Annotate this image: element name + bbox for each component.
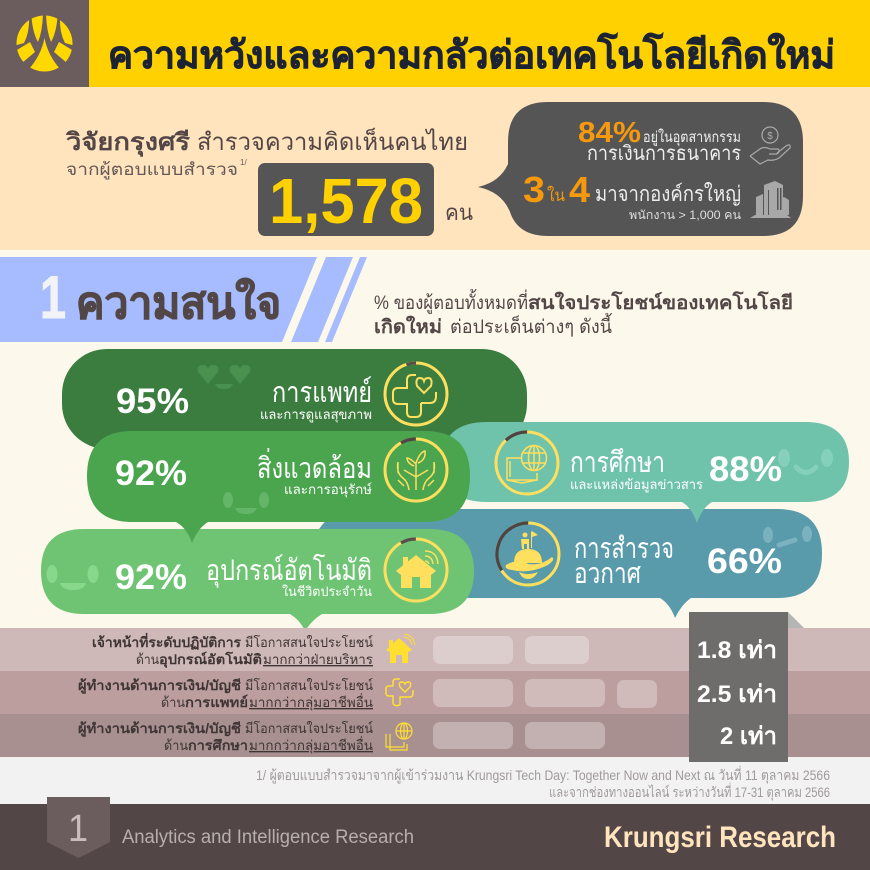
icon: health cross ring [377,355,455,433]
bars: row 2 multiplier [433,679,657,708]
survey intro text [65,127,468,180]
tab: multiplier values: 2 เท่า [720,723,777,750]
tab: multiplier values: 1.8 เท่า [697,637,777,664]
bubble: medical 95%: และการดูแลสุขภาพ [260,407,372,423]
row 3 text [78,720,373,754]
footer: Krungsri Research [604,821,836,854]
respondent count: คน [445,200,473,225]
survey intro text: วิจัยกรุงศรี [65,129,190,158]
icon: astronaut on planet ring [485,511,571,597]
bubble: environment 92%: และการอนุรักษ์ [284,482,372,498]
bubble: automation devices 92%: อุปกรณ์อัตโนมัติ [206,553,372,588]
bubble: space exploration 66%: การสำรวจ [574,533,674,565]
respondent count: 1,578 [269,165,423,237]
tab: multiplier values [689,612,804,762]
face: smile [778,449,833,472]
bubble: automation devices 92% [41,528,474,631]
panel: section heading: 1 [40,264,66,331]
footer [0,797,870,870]
row 1 text: ด้าน [136,652,159,667]
callout: respondent profile [478,102,803,236]
bubble: medical 95% [62,349,527,449]
bubble: education 88%: การศึกษา [570,447,665,479]
badge: page number: 1 [68,808,88,850]
bubble: education 88%: และแหล่งข้อมูลข่าวสาร [570,477,703,493]
footer: Analytics and Intelligence Research [122,827,414,848]
bubble: education 88%: 88% [709,450,782,489]
row 2 text: การแพทย์ [185,694,248,710]
tab: multiplier values: 2.5 เท่า [697,681,777,708]
section description: เกิดใหม่ [374,315,442,338]
icon: small house [386,634,415,663]
row 2 text [78,677,373,711]
bubble: space exploration 66% [312,509,822,618]
row 2 text: ผู้ทำงานด้านการเงิน/บัญชี [78,678,241,694]
icon: hand and coin [750,127,790,164]
survey intro text: สำรวจความคิดเห็นคนไทย [197,127,468,156]
bubble: education 88% [442,419,849,523]
header bar [0,0,870,87]
row 1 text: มากกว่าฝ่ายบริหาร [263,652,373,667]
callout: respondent profile: มาจากองค์กรใหญ่ [595,182,741,206]
row 3 text: ด้าน [164,738,188,753]
row 1 text [92,632,373,668]
title: ความหวังและความกลัวต่อเทคโนโลยีเกิดใหม่ [108,32,835,77]
section description: ต่อประเด็นต่างๆ ดังนี้ [450,313,612,338]
section description: % ของผู้ตอบทั้งหมดที่ [374,289,528,314]
row 3 text: การศึกษา [188,738,248,753]
callout: respondent profile: การเงินการธนาคาร [587,143,741,165]
callout: respondent profile: 4 [569,169,590,210]
badge: page number [47,797,110,858]
callout: respondent profile: พนักงาน > 1,000 คน [629,208,741,222]
panel: occupation multipliers [0,612,870,762]
callout: respondent profile: 3 [523,169,545,210]
panel: section heading [0,257,367,342]
face: neutral smile [223,492,269,514]
icon: small globe and book [386,723,412,750]
page background [0,250,870,628]
icon: small health cross [386,679,413,706]
icon: Krungsri logo [16,16,72,72]
bubble: medical 95%: การแพทย์ [272,376,372,409]
callout: respondent profile: 84% [578,117,641,149]
footnote [0,757,870,804]
face: neutral smile [46,565,98,590]
row 3 text: ผู้ทำงานด้านการเงิน/บัญชี [78,721,241,737]
row 2 text: ด้าน [161,695,185,710]
bubble: space exploration 66%: อวกาศ [574,558,641,590]
bars: row 3 multiplier [433,722,605,749]
icon: office building [750,181,791,218]
bubble: automation devices 92%: 92% [115,558,187,597]
callout: respondent profile: ใน [547,185,565,205]
bubble: environment 92% [87,428,470,543]
callout: respondent profile: อยู่ในอุตสาหกรรม [643,128,741,147]
bubble: automation devices 92%: ในชีวิตประจำวัน [282,584,372,599]
survey intro text: จากผู้ตอบแบบสำรวจ [66,160,238,180]
bubble: environment 92%: 92% [115,454,187,493]
survey intro text: 1/ [240,158,247,167]
row 2 text: มากกว่ากลุ่มอาชีพอื่น [249,693,373,711]
bubble: space exploration 66%: 66% [707,542,782,581]
icon: smart home ring [374,528,458,612]
bubble: medical 95%: 95% [116,382,189,421]
bars: row 1 multiplier [433,636,589,664]
bubble: environment 92%: สิ่งแวดล้อม [257,448,372,485]
icon: hands and plant ring [374,428,458,512]
row 3 text: มากกว่ากลุ่มอาชีพอื่น [249,736,373,754]
panel: survey summary [0,87,870,250]
row 1 text: มีโอกาสสนใจประโยชน์ [245,634,373,650]
row 2 text: มีโอกาสสนใจประโยชน์ [245,677,373,693]
section description [374,289,793,338]
icon: hand and coin: $ [767,131,773,142]
row 1 text: อุปกรณ์อัตโนมัติ [159,650,262,668]
panel: section heading: ความสนใจ [76,277,281,328]
section description: สนใจประโยชน์ของเทคโนโลยี [528,291,793,314]
row 3 text: มีโอกาสสนใจประโยชน์ [245,720,373,736]
face: flat [763,526,812,545]
row 1 text: เจ้าหน้าที่ระดับปฏิบัติการ [92,632,242,651]
icon: globe and book ring [483,419,571,507]
face: hearts [198,365,250,389]
